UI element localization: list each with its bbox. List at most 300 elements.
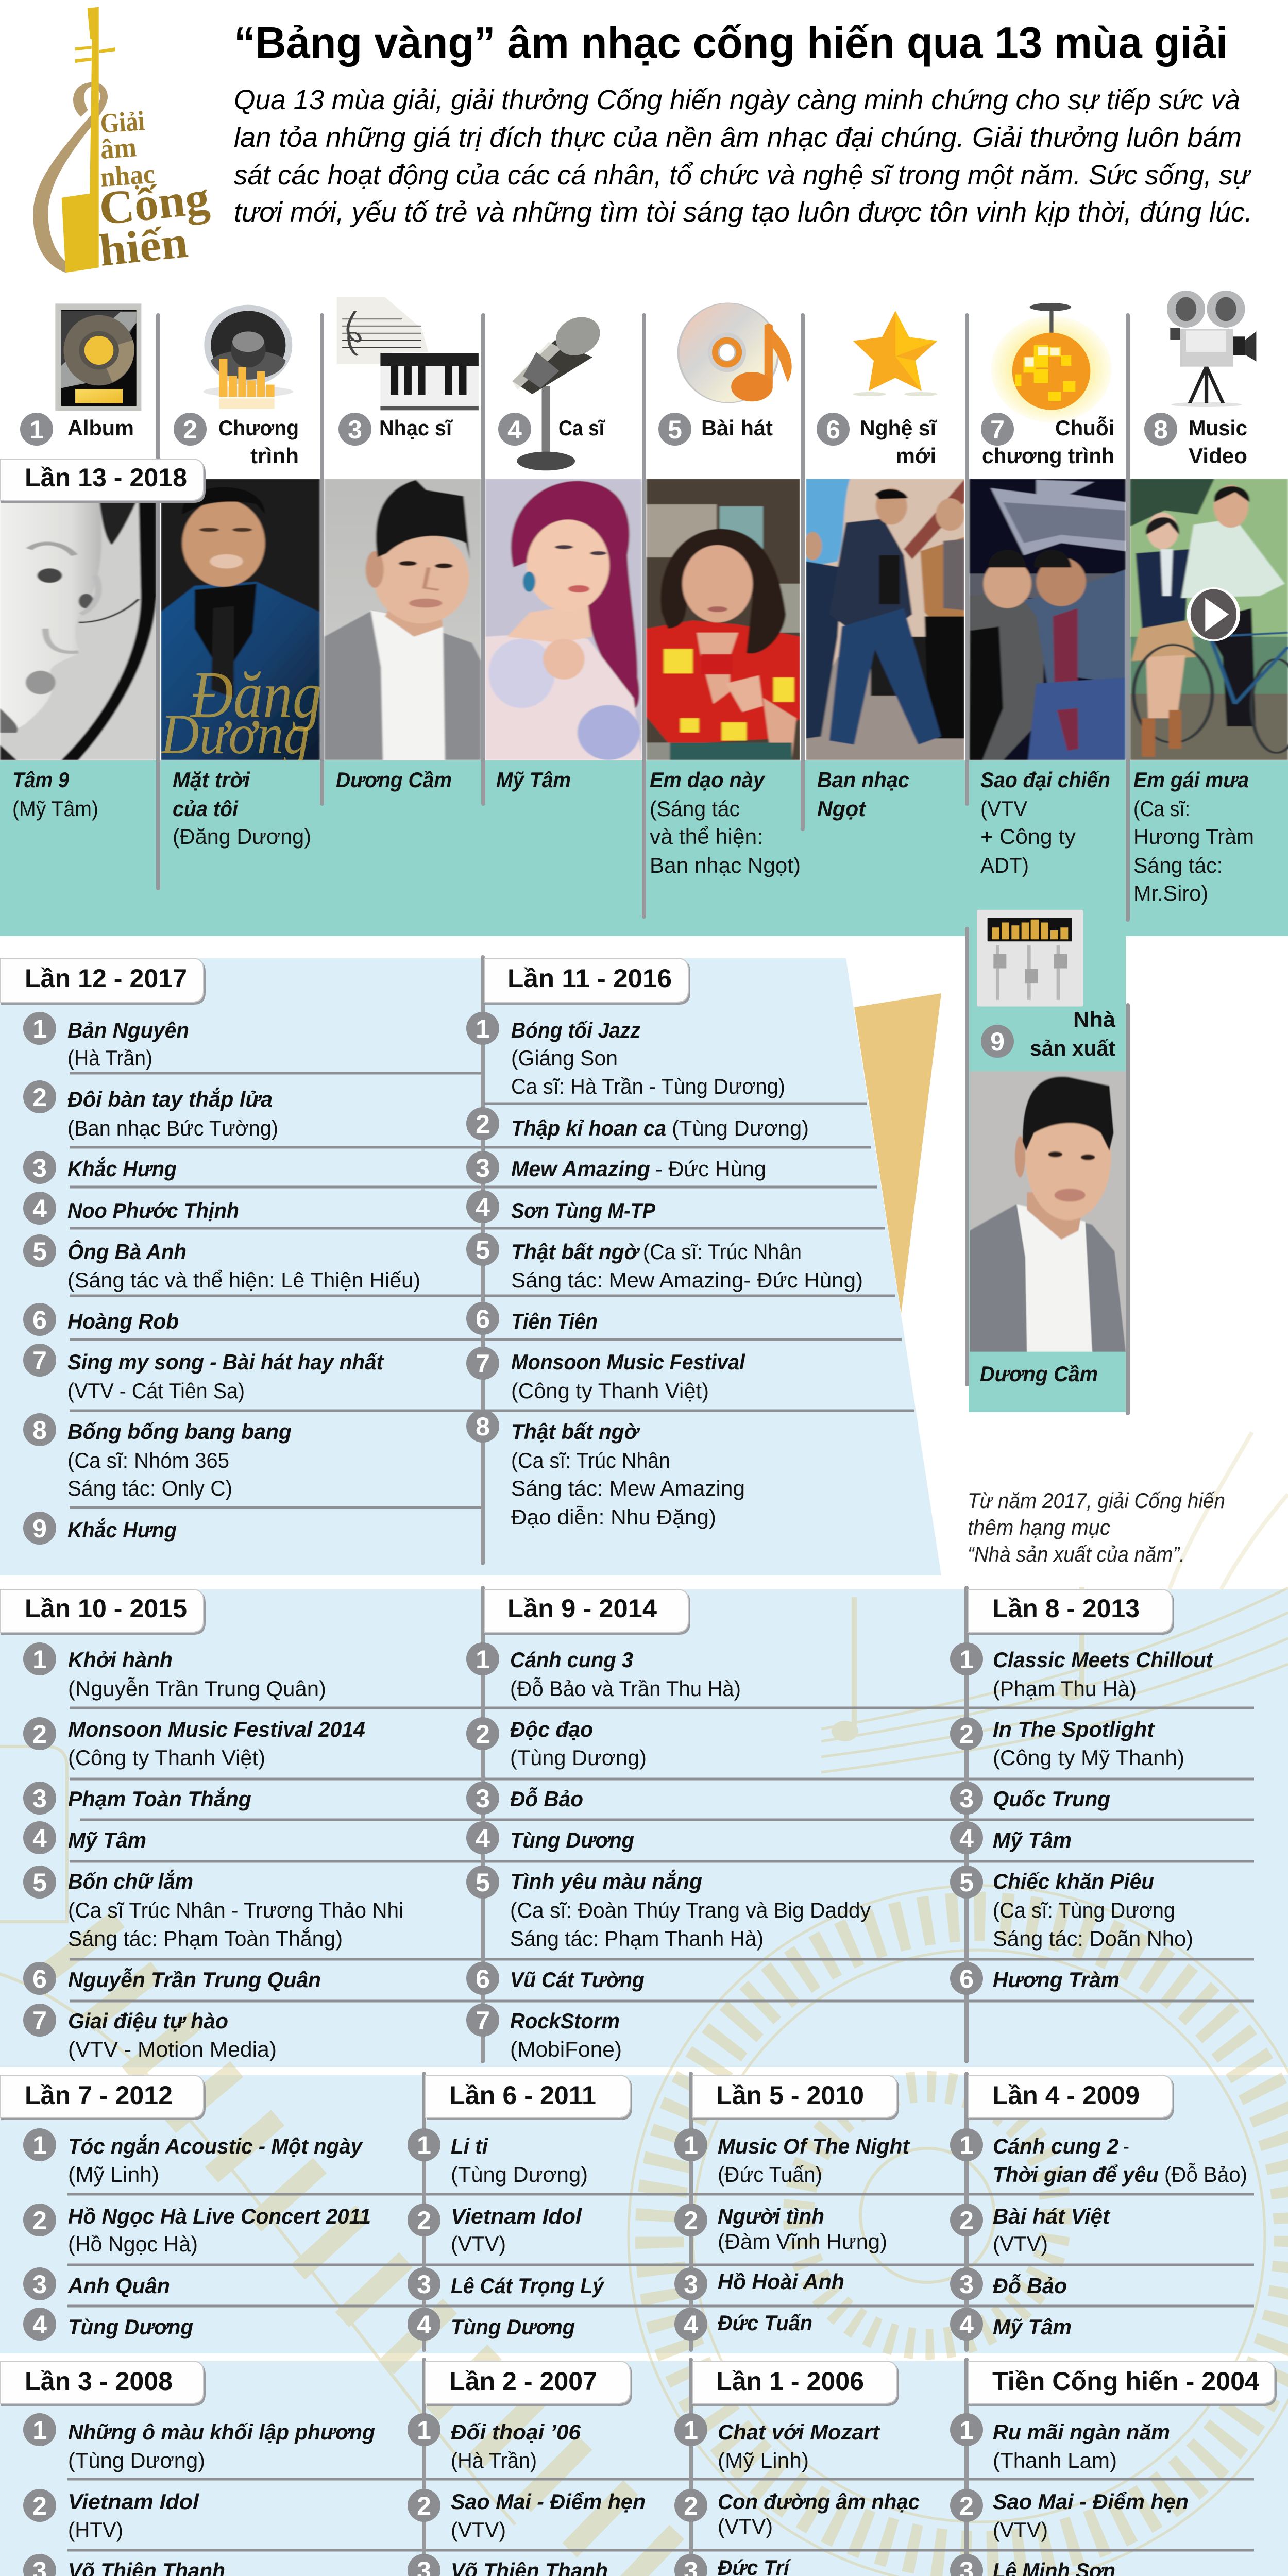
item 7: 7: [476, 2006, 490, 2035]
item 1: Cánh cung 3: [510, 1648, 633, 1672]
category 5: Bài hát: [658, 413, 773, 446]
item 7: [23, 2004, 277, 2061]
item 7: (MobiFone): [510, 2037, 622, 2061]
item 4: 4: [959, 1824, 974, 1853]
item 4: [408, 2308, 575, 2341]
tab: Lần 4 - 2009: [968, 2075, 1172, 2117]
category 6: Nghệ sĩ mới: 6: [826, 415, 840, 444]
item 5: [23, 1866, 403, 1951]
tab: Lần 10 - 2015: [0, 1589, 204, 1632]
tab: Lần 12 - 2017: [0, 958, 204, 1002]
item 1: 1: [32, 1014, 47, 1043]
item 2: 2: [32, 1720, 47, 1749]
item 1: [23, 1642, 326, 1701]
item 2: Sao Mai - Điểm hẹn: [451, 2489, 646, 2514]
photo: Em dạo này: [646, 479, 800, 760]
item 1: 1: [32, 2131, 47, 2160]
item 2: (HTV): [68, 2518, 123, 2542]
tab: Lần 8 - 2013: Lần 8 - 2013: [992, 1594, 1140, 1623]
item 4: [466, 1821, 634, 1854]
item 1: 1: [684, 2416, 698, 2445]
logo: Giải âm nhạc Cống hiến: [33, 7, 212, 276]
winners 2018 captions: ADT): [980, 853, 1029, 877]
item 2: [23, 1080, 278, 1140]
winners 2018 captions: Ngọt: [817, 796, 867, 821]
item 9: 9: [32, 1514, 47, 1543]
item 3: [466, 1782, 583, 1815]
item 5: Sáng tác: Mew Amazing- Đức Hùng): [511, 1268, 863, 1292]
tab: Lần 6 - 2011: [426, 2075, 630, 2117]
item 2: Độc đạo: [510, 1717, 593, 1741]
item 5: Bốn chữ lắm: [68, 1869, 193, 1893]
item 6: Hương Tràm: [993, 1968, 1120, 1992]
item 5: Tình yêu màu nắng: [510, 1869, 702, 1893]
photo: Em gái mưa: [1130, 479, 1288, 760]
item 1: (Mỹ Linh): [718, 2448, 809, 2472]
winners 2018 captions: (Ca sĩ:: [1133, 796, 1190, 821]
item 7: RockStorm: [510, 2009, 620, 2033]
panel: Lần 10 - 2015: [0, 1589, 403, 2061]
item 2: 2: [32, 1083, 47, 1112]
item 3: [408, 2554, 608, 2576]
item 1: (Nguyễn Trần Trung Quân): [68, 1676, 326, 1701]
item 3: [466, 1151, 766, 1184]
item 5: [466, 1233, 863, 1292]
item 6: 6: [476, 1304, 490, 1333]
item 2: 2: [959, 2492, 974, 2520]
category 6: Nghệ sĩ mới: Nghệ sĩ: [860, 416, 937, 440]
item 3: 3: [959, 2270, 974, 2299]
icon: speaker: [204, 305, 293, 409]
item 3: 3: [476, 1154, 490, 1182]
item 3: Quốc Trung: [993, 1787, 1110, 1811]
photo: Dương Cầm, nhà sản xuất: [970, 1071, 1127, 1352]
item 3: Khắc Hưng: [67, 1156, 177, 1181]
item 2: (VTV): [993, 2518, 1048, 2542]
logo: Giải âm nhạc Cống hiến: Cống: [96, 171, 212, 235]
note: từ năm 2017: “Nhà sản xuất của năm”.: [968, 1542, 1185, 1566]
item 7: [23, 1344, 384, 1403]
item 2: [408, 2204, 582, 2256]
tab: Lần 13 - 2018: [0, 459, 204, 500]
winners 2018 captions: Sáng tác:: [1133, 853, 1223, 877]
item 2: 2: [476, 1720, 490, 1749]
item 1: Cánh cung 2: [993, 2134, 1118, 2158]
panel: Lần 4 - 2009: [950, 2075, 1247, 2341]
item 4: 4: [32, 1194, 47, 1223]
winners 2018 captions: (VTV: [980, 796, 1027, 821]
winners 2018 captions: Hương Tràm: [1133, 824, 1254, 849]
item 1: [23, 2413, 375, 2472]
item 2: 2: [417, 2206, 431, 2235]
item 1: [408, 2128, 588, 2187]
item 2: [950, 1717, 1184, 1770]
item 1: (Phạm Thu Hà): [993, 1676, 1137, 1701]
item 1: Ru mãi ngàn năm: [993, 2420, 1170, 2444]
tab: Lần 7 - 2012: [0, 2075, 204, 2117]
winners 2018 captions: (Đăng Dương): [173, 824, 311, 849]
panel: Tiền Cống hiến - 2004: [950, 2361, 1275, 2576]
panel: Lần 11 - 2016: [466, 957, 914, 1563]
item 1: Những ô màu khối lập phương: [68, 2420, 375, 2444]
column separators Lần 10-8: [483, 1588, 967, 2061]
item 1: [674, 2128, 910, 2187]
item 7: (VTV - Cát Tiên Sa): [67, 1379, 245, 1403]
category 3: Nhạc sĩ: 3: [348, 415, 362, 444]
item 2: 2: [684, 2206, 698, 2235]
item 1: [950, 2128, 1247, 2187]
item 6: [950, 1962, 1120, 1995]
item 1: [466, 1012, 785, 1098]
item 6: [466, 1302, 598, 1335]
logo: Giải âm nhạc Cống hiến: hiến: [97, 217, 190, 276]
item 2: 2: [959, 1720, 974, 1749]
item 2: (VTV): [451, 2232, 506, 2256]
item 2: Người tình: [718, 2204, 824, 2228]
item 6: [23, 1962, 321, 1995]
item 5: 5: [32, 1868, 47, 1897]
item 2: [466, 1107, 809, 1140]
item 3: - Đức Hùng: [655, 1157, 766, 1181]
panel: Lần 3 - 2008: [0, 2361, 375, 2576]
photo: Mỹ Tâm: [485, 479, 642, 760]
item 2: 2: [684, 2492, 698, 2520]
tab: Lần 9 - 2014: Lần 9 - 2014: [507, 1594, 657, 1623]
item 5: (Sáng tác và thể hiện: Lê Thiện Hiếu): [67, 1268, 420, 1292]
item 3: Đỗ Bảo: [993, 2273, 1067, 2298]
category 1: Album: 1: [29, 415, 44, 444]
item 8: [466, 1410, 745, 1529]
photo: Mặt trời của tôi: [160, 479, 322, 766]
item 1: Đối thoại ’06: [451, 2420, 581, 2444]
item 2: Sao Mai - Điểm hẹn: [993, 2489, 1189, 2514]
winners 2018 captions: Ban nhạc Ngọt): [650, 853, 801, 877]
category 4: Ca sĩ: 4: [507, 415, 522, 444]
item 3: Đỗ Bảo: [510, 1786, 583, 1811]
tab: Lần 8 - 2013: [968, 1589, 1172, 1632]
item 8: Thật bất ngờ: [511, 1419, 640, 1444]
item 6: 6: [959, 1964, 974, 1993]
item 2: (Tùng Dương): [510, 1745, 647, 1770]
item 1: Thời gian để yêu: [993, 2162, 1159, 2187]
item 1: (Hà Trần): [451, 2448, 537, 2472]
item 1: [950, 1642, 1214, 1701]
item 4: 4: [959, 2310, 974, 2339]
icon: disco ball: [991, 303, 1112, 422]
item 7: Giai điệu tự hào: [68, 2009, 228, 2033]
icon: star: [853, 311, 937, 396]
category 2: Chương trình: trình: [250, 444, 299, 468]
item 1: [23, 1012, 189, 1070]
item 1: (Tùng Dương): [451, 2162, 588, 2187]
category 4: Ca sĩ: Ca sĩ: [558, 416, 605, 440]
item 2: Hồ Ngọc Hà Live Concert 2011: [68, 2204, 371, 2228]
category 6: Nghệ sĩ mới: [817, 413, 937, 468]
photo: Mặt trời của tôi: Đăng: [190, 658, 322, 732]
item 5: Thật bất ngờ: [511, 1240, 640, 1264]
item 3: [408, 2267, 605, 2300]
tab: Lần 11 - 2016: Lần 11 - 2016: [507, 964, 672, 993]
tab: Lần 5 - 2010: [692, 2075, 897, 2117]
item 4: [950, 2308, 1072, 2341]
item 1: [950, 2413, 1170, 2472]
row dividers Lần 3-Tiền Cống hiến: [67, 2479, 1254, 2576]
item 7: 7: [32, 2006, 47, 2035]
tab: Lần 1 - 2006: [692, 2361, 897, 2403]
item 5: (Ca sĩ Trúc Nhân - Trương Thảo Nhi: [68, 1898, 403, 1922]
icon: microphone: [512, 316, 604, 470]
tab: Lần 2 - 2007: Lần 2 - 2007: [449, 2367, 597, 2396]
item 3: [950, 1782, 1110, 1815]
item 1: Tóc ngắn Acoustic - Một ngày: [68, 2133, 364, 2158]
item 3: Mew Amazing: [511, 1157, 650, 1181]
item 4: 4: [684, 2310, 698, 2339]
title: “Bảng vàng” âm nhạc cống hiến qua 13 mùa giải: [234, 19, 1228, 67]
item 2: 2: [32, 2206, 47, 2235]
item 7: 7: [32, 1346, 47, 1375]
item 1: Chat với Mozart: [718, 2420, 880, 2444]
category 9: Nhà sản xuất: sản xuất: [1030, 1036, 1115, 1060]
item 2: Vietnam Idol: [451, 2204, 582, 2228]
item 6: Tiên Tiên: [511, 1309, 598, 1333]
item 1: (Thanh Lam): [993, 2448, 1117, 2472]
winners 2018 captions: (Mỹ Tâm): [12, 796, 98, 821]
item 5: [23, 1234, 420, 1292]
item 1: Khởi hành: [68, 1648, 173, 1672]
category 7: Chuỗi chương trình: [981, 413, 1114, 468]
item 6: Nguyễn Trần Trung Quân: [68, 1967, 321, 1992]
item 2: [408, 2489, 646, 2542]
item 7: Sing my song - Bài hát hay nhất: [67, 1350, 384, 1374]
item 2: 2: [32, 2492, 47, 2520]
category 3: Nhạc sĩ: Nhạc sĩ: [379, 416, 453, 440]
item 4: Mỹ Tâm: [993, 1828, 1072, 1852]
item 1: [674, 2413, 880, 2472]
category 9: Nhà sản xuất: Nhà: [1073, 1007, 1116, 1031]
panel: base panels for past seasons: [0, 958, 1288, 2576]
winners 2018 captions: Tâm 9: [12, 768, 70, 792]
tab: Lần 13 - 2018: Lần 13 - 2018: [25, 463, 187, 492]
category 7: Chuỗi chương trình: Chuỗi: [1055, 415, 1114, 440]
item 2: (VTV): [993, 2232, 1048, 2256]
teal panel: Lần 13 captions background: [0, 760, 1288, 1412]
item 2: [23, 1717, 365, 1770]
category 9: Nhà sản xuất: [981, 1007, 1116, 1060]
tab: Lần 9 - 2014: [484, 1589, 688, 1632]
item 4: 4: [32, 1824, 47, 1853]
item 4: [674, 2308, 812, 2341]
gold triangle: [854, 993, 941, 1314]
item 1: 1: [476, 1645, 490, 1674]
note: từ năm 2017: thêm hạng mục: [968, 1515, 1110, 1539]
item 3: [23, 2267, 170, 2300]
producer name: Dương Cầm: [980, 1362, 1098, 1386]
panel: Lần 8 - 2013: [950, 1589, 1214, 1995]
item 1: 1: [476, 1014, 490, 1043]
item 2: (VTV): [718, 2514, 773, 2538]
item 6: Hoàng Rob: [67, 1309, 179, 1333]
item 2: [950, 2489, 1189, 2542]
item 2: [23, 2204, 371, 2256]
item 6: [23, 1303, 179, 1336]
row dividers Lần 7-4: [67, 2194, 1254, 2306]
item 1: (Đỗ Bảo): [1164, 2162, 1247, 2187]
item 1: (Mỹ Linh): [68, 2162, 159, 2187]
tab: Tiền Cống hiến - 2004: Tiền Cống hiến - 2004: [992, 2367, 1259, 2396]
item 3: Lê Cát Trọng Lý: [451, 2274, 605, 2298]
tab: Lần 10 - 2015: Lần 10 - 2015: [25, 1594, 187, 1623]
item 2: [466, 1717, 647, 1770]
item 1: 1: [32, 1645, 47, 1674]
item 1: Music Of The Night: [718, 2134, 910, 2158]
item 2: (Hồ Ngọc Hà): [68, 2232, 198, 2256]
tab: Lần 7 - 2012: Lần 7 - 2012: [25, 2081, 173, 2110]
item 1: (Giáng Son: [511, 1046, 618, 1070]
icon: album: [55, 303, 141, 411]
item 8: Sáng tác: Only C): [67, 1476, 232, 1500]
note: từ năm 2017: [968, 1488, 1225, 1566]
item 4: Mỹ Tâm: [993, 2315, 1072, 2339]
item 3: 3: [32, 1154, 47, 1182]
intro paragraph: sát các hoạt động của các cá nhân, tổ chức và nghệ sĩ trong một năm. Sức sống, sự: [234, 160, 1252, 191]
category 7: Chuỗi chương trình: chương trình: [982, 444, 1114, 468]
item 3: [23, 1782, 251, 1815]
item 3: [950, 2554, 1115, 2576]
item 2: Bài hát Việt: [993, 2204, 1111, 2228]
item 5: Chiếc khăn Piêu: [993, 1869, 1154, 1893]
item 5: Sáng tác: Phạm Toàn Thắng): [68, 1926, 343, 1951]
item 8: (Ca sĩ: Trúc Nhân: [511, 1448, 670, 1472]
item 5: 5: [959, 1868, 974, 1897]
winners 2018 captions: Dương Cầm: [336, 768, 452, 792]
tab: Lần 6 - 2011: Lần 6 - 2011: [449, 2081, 596, 2110]
watermark: piano spiral and notes: [0, 1432, 1288, 2576]
panel: Lần 6 - 2011: [408, 2075, 630, 2341]
item 5: 5: [476, 1868, 490, 1897]
category 1: Album: Album: [67, 416, 134, 440]
item 5: Sáng tác: Phạm Thanh Hà): [510, 1926, 764, 1951]
item 1: 1: [959, 2131, 974, 2160]
item 4: 4: [417, 2310, 431, 2339]
intro paragraph: [234, 84, 1252, 228]
item 7: [466, 2004, 622, 2061]
panel: Lần 9 - 2014: [466, 1589, 871, 2061]
photo: Ban nhạc Ngọt: [804, 479, 964, 760]
item 4: Noo Phước Thịnh: [67, 1198, 239, 1223]
producer column side lines: [967, 929, 1128, 1413]
category 1: Album: [20, 413, 134, 446]
category 5: Bài hát: 5: [668, 415, 682, 444]
intro paragraph: Qua 13 mùa giải, giải thưởng Cống hiến ngày càng minh chứng cho sự tiếp sức và: [234, 84, 1240, 115]
item 2: (Công ty Mỹ Thanh): [993, 1745, 1184, 1770]
category 2: Chương trình: 2: [183, 415, 197, 444]
item 5: 5: [32, 1237, 47, 1266]
category 8: Music Video: 8: [1154, 415, 1168, 444]
item 6: 6: [32, 1306, 47, 1334]
item 2: (Đàm Vĩnh Hưng): [718, 2229, 887, 2253]
tab: Lần 4 - 2009: Lần 4 - 2009: [992, 2081, 1140, 2110]
tab: Tiền Cống hiến - 2004: [968, 2361, 1275, 2403]
item 2: [23, 2489, 199, 2542]
item 5: (Ca sĩ: Trúc Nhân: [643, 1240, 802, 1264]
winners 2018 captions: Sao đại chiến: [980, 768, 1110, 792]
item 7: 7: [476, 1349, 490, 1378]
photo: Mặt trời của tôi: Dương: [160, 703, 310, 766]
item 4: [23, 1192, 239, 1225]
item 1: Bản Nguyên: [67, 1018, 189, 1042]
item 2: (Công ty Thanh Việt): [68, 1745, 265, 1770]
item 7: Monsoon Music Festival: [511, 1350, 745, 1374]
item 7: (Công ty Thanh Việt): [511, 1379, 709, 1403]
item 1: 1: [32, 2416, 47, 2445]
icon: sheet music and piano: [337, 297, 479, 410]
item 3: [674, 2554, 792, 2576]
item 2: Con đường âm nhạc: [718, 2489, 920, 2514]
item 1: Classic Meets Chillout: [993, 1648, 1214, 1672]
item 1: (Tùng Dương): [68, 2448, 205, 2472]
item 4: [23, 1821, 146, 1854]
panel: Lần 12 - 2017: [0, 958, 481, 1545]
column separators Lần 3-Tiền Cống hiến: [424, 2360, 967, 2576]
winners 2018 captions: [12, 768, 1254, 905]
item 4: [950, 1821, 1072, 1854]
item 5: [950, 1866, 1193, 1951]
column separators Lần 7-4: [424, 2074, 967, 2350]
panel: Lần 5 - 2010: [674, 2075, 910, 2341]
item 5: (Ca sĩ: Tùng Dương: [993, 1898, 1175, 1922]
item 6: 6: [32, 1964, 47, 1993]
item 2: 2: [417, 2492, 431, 2520]
item 3: 3: [417, 2270, 431, 2299]
category 8: Music Video: Music: [1189, 416, 1247, 440]
item 2: [674, 2489, 920, 2538]
item 3: 3: [959, 1784, 974, 1813]
category 2: Chương trình: Chương: [218, 416, 299, 440]
category 3: Nhạc sĩ: [338, 413, 453, 446]
item 5: [466, 1866, 871, 1951]
item 1: (Đức Tuấn): [718, 2162, 822, 2187]
tab: Lần 3 - 2008: Lần 3 - 2008: [25, 2367, 173, 2396]
item 1: 1: [959, 1645, 974, 1674]
item 6: [466, 1962, 645, 1995]
item 1: Li ti: [451, 2134, 488, 2158]
item 1: 1: [417, 2416, 431, 2445]
item 8: (Ca sĩ: Nhóm 365: [67, 1448, 229, 1472]
item 3: [950, 2267, 1067, 2300]
item 3: 3: [684, 2270, 698, 2299]
winners 2018 captions: + Công ty: [980, 824, 1076, 849]
tab: Lần 1 - 2006: Lần 1 - 2006: [716, 2367, 864, 2396]
photo: Sao đại chiến: [969, 479, 1126, 760]
item 3: Phạm Toàn Thắng: [68, 1786, 251, 1811]
item 8: 8: [32, 1416, 47, 1445]
item 2: [950, 2204, 1111, 2256]
logo: Giải âm nhạc Cống hiến: âm: [99, 131, 138, 165]
item 3: [23, 1151, 177, 1184]
winners 2018 captions: Em dạo này: [650, 768, 766, 792]
tab: Lần 5 - 2010: Lần 5 - 2010: [716, 2081, 864, 2110]
item 7: (VTV - Motion Media): [68, 2037, 277, 2061]
category 2: Chương trình: [174, 413, 299, 468]
category 6: Nghệ sĩ mới: mới: [896, 444, 936, 468]
item 2: (Ban nhạc Bức Tường): [67, 1116, 278, 1140]
tab: Lần 3 - 2008: [0, 2361, 204, 2403]
item 3: [674, 2267, 844, 2300]
winners 2018 captions: và thể hiện:: [650, 824, 763, 849]
item 5: Sáng tác: Doãn Nho): [993, 1926, 1193, 1951]
item 4: [466, 1190, 656, 1223]
tab: Lần 12 - 2017: Lần 12 - 2017: [25, 964, 187, 993]
